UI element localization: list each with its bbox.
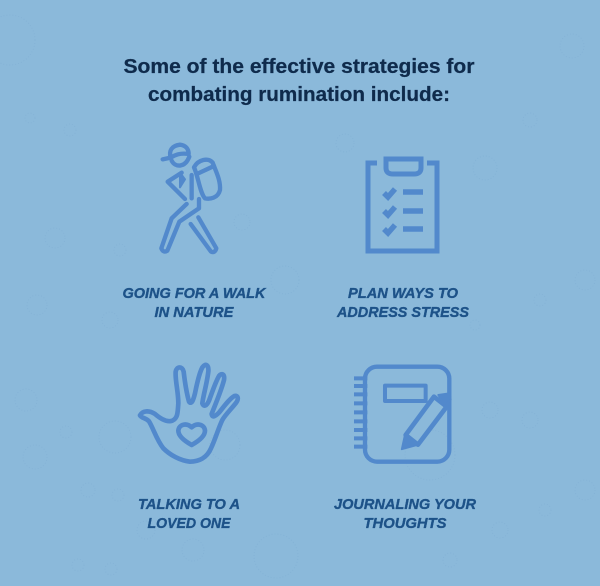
icon: hiker with backpack: [161, 145, 220, 252]
label: plan ways: [336, 286, 469, 321]
label: plan ways: ADDRESS STRESS: [336, 305, 469, 321]
label: journaling your thoughts: JOURNALING YOUR: [334, 497, 477, 513]
title: Some of the effective strategies for: [124, 56, 475, 78]
icon: clipboard checklist: [368, 159, 437, 251]
title: [124, 56, 475, 106]
icon: hand with heart: [140, 365, 238, 462]
label: journaling your thoughts: [334, 497, 477, 532]
label: going for a walk: GOING FOR A WALK: [122, 286, 267, 302]
label: plan ways: PLAN WAYS TO: [348, 286, 459, 302]
label: journaling your thoughts: THOUGHTS: [364, 516, 447, 532]
title: combating rumination include:: [148, 84, 450, 106]
label: going for a walk: [122, 286, 267, 321]
label: going for a walk: IN NATURE: [154, 305, 235, 321]
label: talking to a loved one: [138, 497, 240, 532]
icon: spiral notebook with pencil: [354, 367, 451, 462]
label: talking to a loved one: LOVED ONE: [148, 516, 232, 532]
label: talking to a loved one: TALKING TO A: [138, 497, 240, 513]
